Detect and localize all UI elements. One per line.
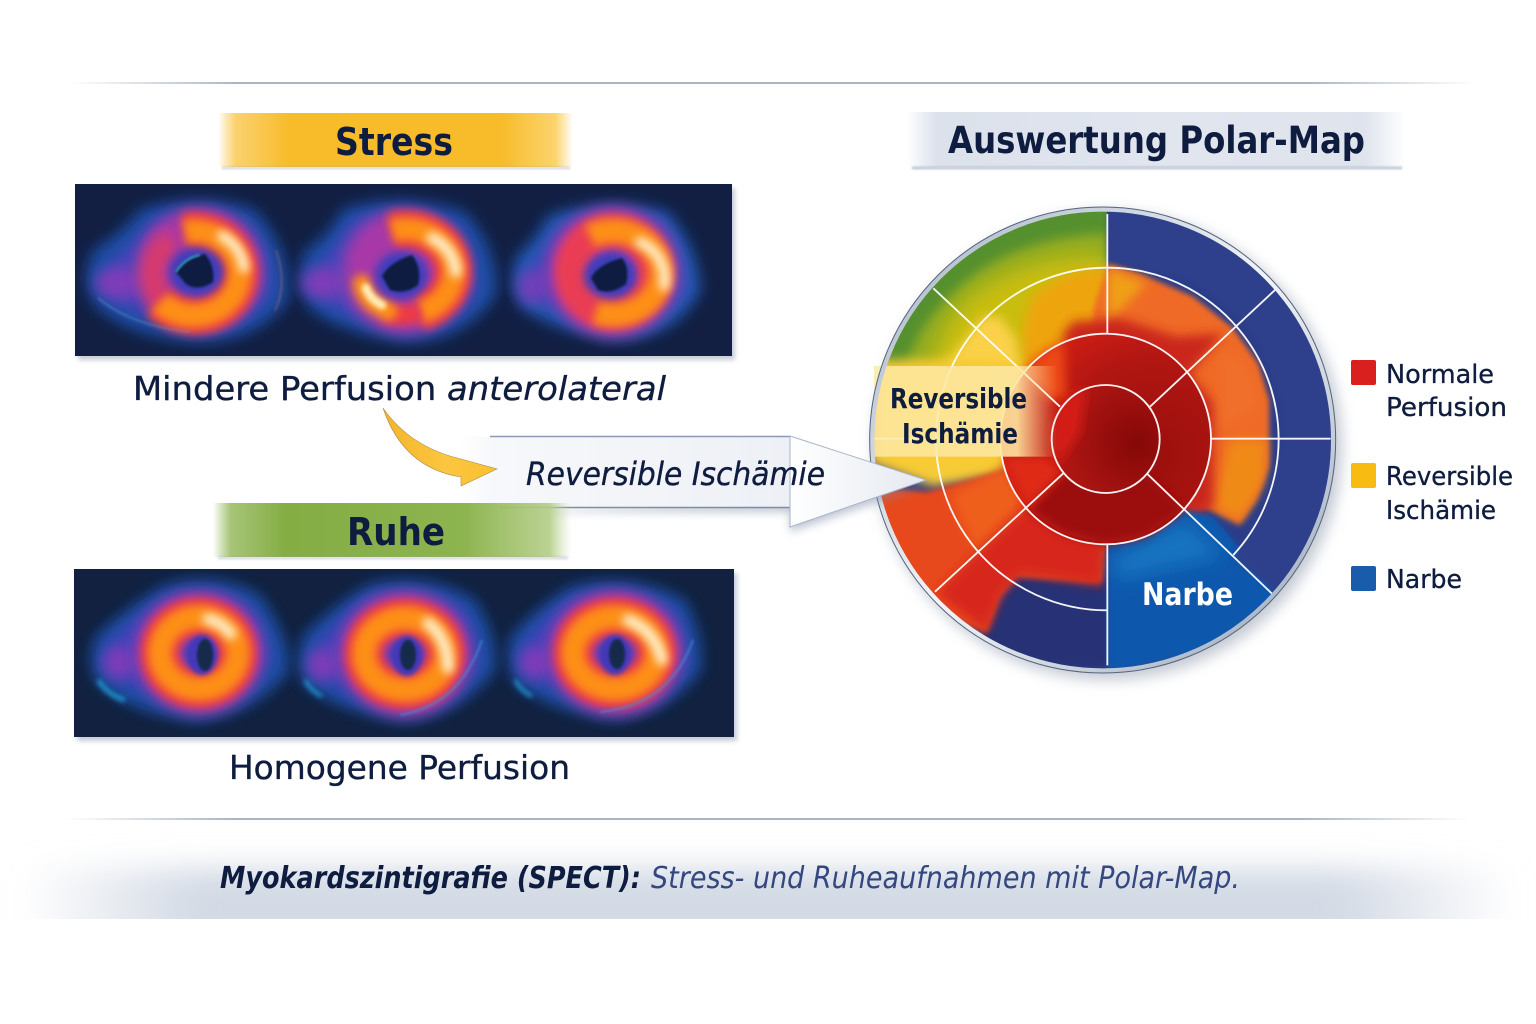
heat: green anterior sector: [887, 212, 1108, 470]
scan: stress slice 3: [512, 204, 700, 340]
heading: Stress: Stress: [335, 120, 453, 164]
label: Reversible Ischaemie on map: Reversible: [890, 382, 1027, 415]
scan: rest slice 1: [91, 579, 288, 722]
legend item: normale Perfusion: Normale: [1386, 360, 1494, 390]
legend item: normale Perfusion: [1351, 360, 1507, 423]
heat: yellow ischemic field: [870, 360, 1047, 487]
arrow: small gold curved arrow: [383, 408, 497, 486]
legend item: reversible Ischaemie: Reversible: [1386, 462, 1513, 492]
scan: stress slice 1: [86, 200, 288, 342]
caption: Mindere Perfusion anterolateral: Mindere Perfusion anterolateral: [133, 369, 666, 408]
footer band: [56, 856, 1480, 919]
heading: Auswertung Polar-Map: Auswertung Polar-Map: [948, 119, 1365, 162]
footer text: Myokardszintigrafie (SPECT):: [220, 861, 641, 896]
scan: rest slice 2: [298, 580, 495, 722]
heading: Auswertung Polar-Map: [907, 112, 1405, 169]
heat: blue right rim cover: [1104, 212, 1276, 592]
scan: rest slice 3: [508, 581, 701, 720]
legend item: reversible Ischaemie: [1351, 462, 1513, 526]
scan: stress slice 2: [299, 200, 496, 342]
label: Narbe on map: Narbe: [1142, 577, 1233, 613]
panel: Stress scan images: [75, 184, 735, 360]
grid: polar map segment lines: [874, 214, 1331, 665]
callout highlight: reversible ischaemia: [874, 366, 1057, 457]
heading: Stress: [218, 113, 573, 169]
panel: Ruhe scan images: [74, 569, 737, 741]
heat: orange lateral field: [1093, 263, 1269, 525]
arrow: Reversible Ischaemie white callout: Reversible Ischämie: [526, 455, 825, 493]
heat: narbe scar field: [1108, 510, 1280, 673]
legend item: reversible Ischaemie: Ischämie: [1386, 496, 1496, 526]
arrow: Reversible Ischaemie white callout: [460, 436, 926, 532]
legend: [1351, 360, 1513, 595]
heading: Ruhe: [213, 503, 571, 559]
chart: polar map: [860, 200, 1360, 700]
label: Reversible Ischaemie on map: [890, 382, 1027, 450]
footer text: Stress- und Ruheaufnahmen mit Polar-Map.: [651, 861, 1240, 896]
heading: Ruhe: Ruhe: [347, 510, 445, 554]
heat: central dark red core: [1001, 334, 1211, 544]
legend item: Narbe: [1351, 565, 1462, 595]
heat: lower scar field: [982, 578, 1106, 668]
heat: orange-red inferolateral field: [881, 468, 1109, 636]
legend item: Narbe: Narbe: [1386, 565, 1462, 595]
disk rim: [872, 209, 1333, 671]
legend item: normale Perfusion: Perfusion: [1386, 393, 1507, 423]
caption: Homogene Perfusion: Homogene Perfusion: [229, 748, 570, 787]
label: Reversible Ischaemie on map: Ischämie: [902, 417, 1018, 450]
